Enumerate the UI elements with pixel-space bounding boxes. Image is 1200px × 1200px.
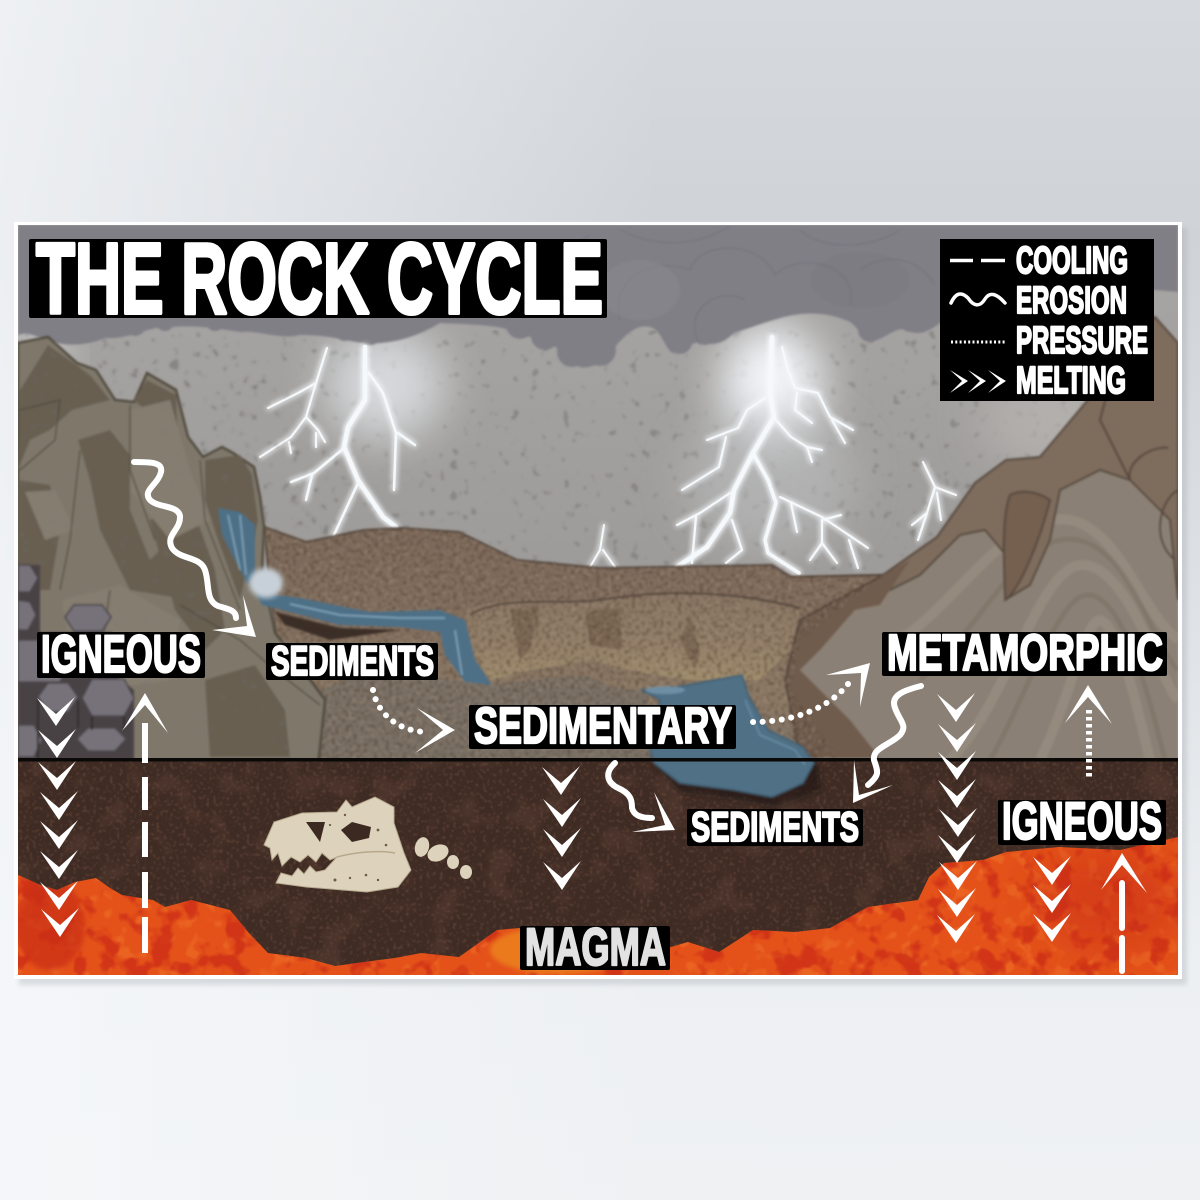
panel: magma (18, 837, 1178, 975)
label: sediments lower: SEDIMENTS (691, 803, 859, 850)
illustration (15, 225, 1180, 975)
lightning bolts (260, 337, 956, 573)
arrow: pressure up to metamorphic (1065, 685, 1112, 778)
bolt: main right (677, 337, 868, 573)
panel: underground rock (18, 760, 1178, 975)
panel: metamorphic mountain (770, 317, 1178, 765)
legend: melting (950, 360, 1126, 402)
label: sediments lower (687, 803, 863, 850)
panel: stormy sky (15, 225, 1178, 765)
panel: basalt columns (18, 565, 134, 760)
title: THE ROCK CYCLE (36, 223, 603, 335)
storm clouds (18, 225, 1178, 368)
lake (642, 675, 822, 807)
arrow: erosion metamorphic to sediments (853, 686, 921, 803)
arrow: erosion sedimentary to sediments (608, 763, 675, 832)
label: sedimentary: SEDIMENTARY (474, 697, 732, 754)
legend (940, 239, 1154, 402)
bolt: left large (260, 347, 415, 537)
arrow: melting chevrons far right (1033, 856, 1071, 942)
bolt: small centre (590, 525, 615, 567)
legend: cooling: COOLING (1016, 240, 1128, 282)
arrow: melting chevrons centre (542, 766, 581, 890)
panel: igneous mountain (18, 337, 328, 765)
arrow: erosion to sediments left (134, 462, 256, 637)
label: sediments left (266, 637, 438, 684)
arrow: melting chevrons right column (937, 693, 977, 943)
fossil: dinosaur skull (264, 797, 472, 892)
poster frame (14, 222, 1187, 985)
legend: melting: MELTING (1016, 360, 1126, 402)
label: magma (520, 918, 670, 977)
label: sediments left: SEDIMENTS (271, 637, 434, 684)
label: igneous left: IGNEOUS (41, 625, 201, 684)
legend: erosion: EROSION (1016, 280, 1127, 322)
arrow: pressure sediments to sedimentary (373, 690, 455, 753)
arrow: cooling up left (122, 693, 168, 953)
legend: erosion (951, 280, 1127, 322)
arrow: pressure sedimentary to metamorphic (753, 663, 870, 722)
panel: flowing water and waterfall (218, 508, 492, 685)
panel: sedimentary strata (264, 520, 904, 760)
title (29, 223, 607, 335)
arrow: cooling up right (1101, 853, 1147, 971)
bolt: small right (912, 462, 956, 540)
ground line (18, 758, 1178, 762)
label: igneous left (37, 625, 205, 684)
label: magma: MAGMA (525, 918, 666, 977)
arrow: melting chevrons left (37, 697, 79, 937)
